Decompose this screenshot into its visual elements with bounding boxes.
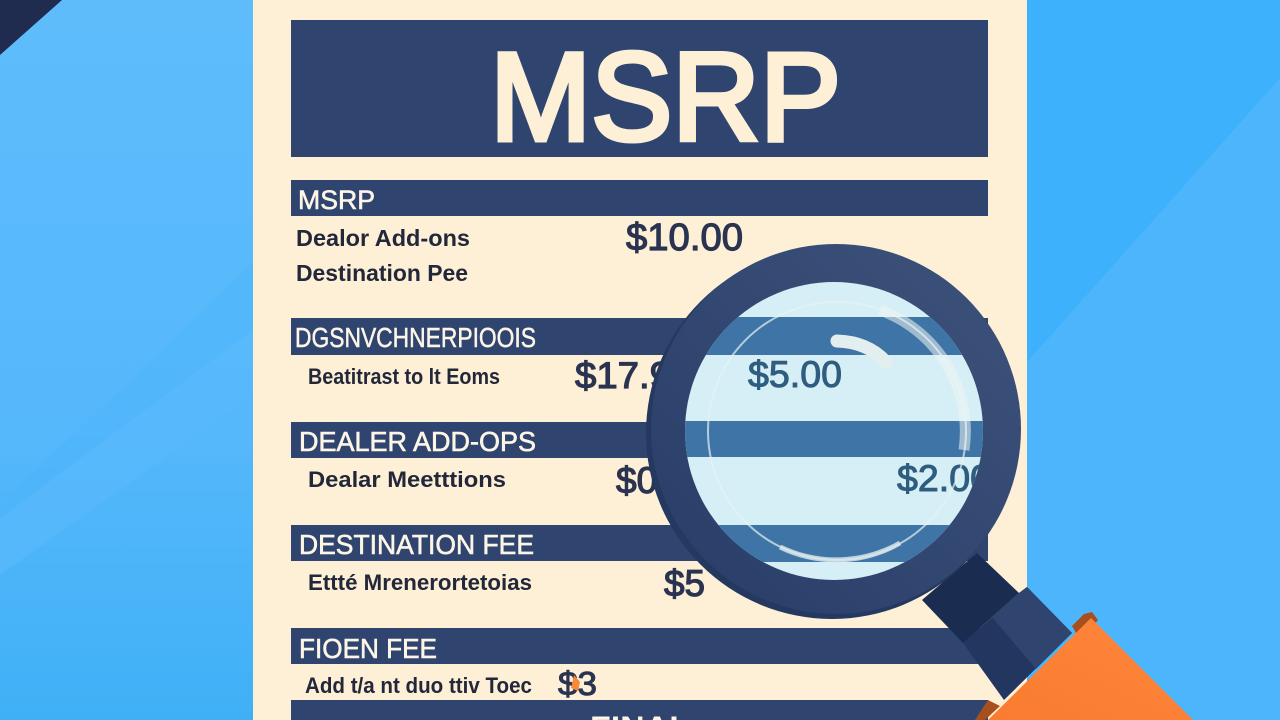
section: destination fee: Ettté Mrenerortetoias [308,570,532,595]
section: fioen fee: Add t/a nt duo ttiv Toec [305,673,532,698]
section: dealer add-ops: Dealar Meetttions [308,467,506,492]
magnifier ring [646,244,1021,619]
title banner [291,20,988,167]
magnifier lens [685,282,991,580]
section: garbled heading: Beatitrast to lt Eoms [308,364,500,389]
section: MSRP: Dealor Add-ons [296,225,470,251]
background: left blue panel [0,0,256,720]
section: MSRP: MSRP [298,185,375,215]
section: garbled heading: $17.9 [575,355,671,396]
title banner: MSRP [490,28,841,167]
lens glare highlight [837,341,886,362]
section: dealer add-ops: $0 [616,460,657,501]
panel: price sticker document [253,0,1027,720]
section: MSRP: $10.00 [626,217,743,259]
section: MSRP: Destination Pee [296,260,468,286]
lens inner reflection ring [708,302,966,560]
section: garbled heading: DGSNVCHNERPIOOIS [295,322,536,353]
section: final [291,700,988,720]
section: destination fee: $5 [664,563,705,604]
section: fioen fee: $3 [558,665,597,702]
background: right blue panel [1024,0,1280,720]
section: fioen fee: FIOEN FEE [299,633,437,664]
section: fioen fee [291,628,988,702]
section: MSRP [291,180,988,286]
section: dealer add-ops [291,422,988,501]
section: dealer add-ops: DEALER ADD-OPS [299,426,536,457]
icon: magnifying glass [646,244,1193,720]
section: destination fee [291,525,988,604]
magnifier handle [922,553,1193,720]
lens value: $5.00: $5.00 [748,354,842,395]
section: destination fee: DESTINATION FEE [299,529,534,560]
corner accent triangle [0,0,62,55]
section: garbled heading [291,318,988,396]
lens value: $2.00: $2.00 [897,458,991,499]
